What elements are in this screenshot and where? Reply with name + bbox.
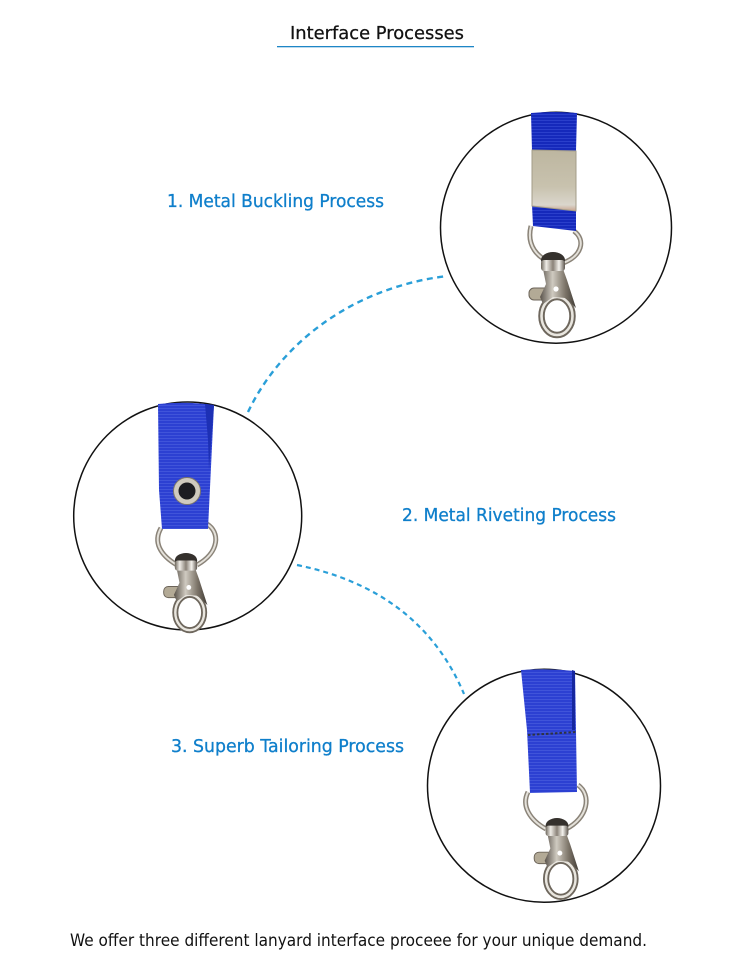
panel: superb tailoring circle: [428, 669, 660, 902]
footer text: We offer three different lanyard interface proceee for your unique demand.: [70, 931, 647, 951]
lobster clasp: [529, 252, 576, 335]
D-ring: [158, 524, 216, 565]
lanyard strap bottom: [532, 205, 576, 231]
title: Interface Processes: [290, 23, 464, 44]
rivet: [174, 478, 200, 504]
lobster clasp: [164, 553, 207, 630]
lanyard strap: [158, 403, 214, 529]
arrow: dashed connector 2 to 3: [297, 565, 464, 694]
lanyard strap top: [531, 112, 577, 151]
label: step 3: 3. Superb Tailoring Process: [171, 736, 404, 757]
lobster clasp: [534, 818, 579, 897]
label: step 2: 2. Metal Riveting Process: [402, 505, 616, 526]
arrow: dashed connector 1 to 2: [248, 276, 447, 412]
lanyard strap: [521, 669, 577, 793]
metal buckle: [532, 150, 576, 211]
D-ring: [530, 226, 581, 263]
D-ring: [526, 785, 586, 829]
label: step 1: 1. Metal Buckling Process: [167, 191, 384, 212]
panel: metal riveting circle: [74, 402, 302, 630]
panel: metal buckling circle: [440, 112, 672, 343]
stitch line: [528, 732, 576, 735]
